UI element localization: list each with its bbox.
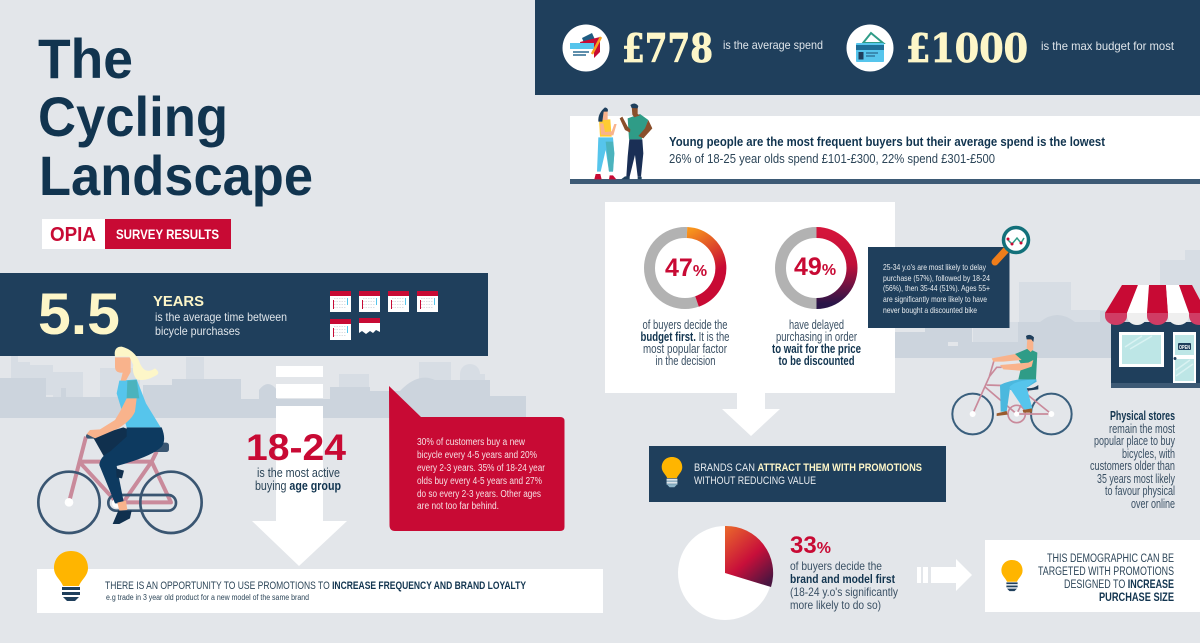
stat: 18-24: buying age group	[255, 478, 341, 493]
skyline right	[895, 250, 1200, 358]
years caption: YEARS	[153, 293, 204, 310]
callout: delay by age: purchase (57%), followed by 18-24	[883, 273, 990, 283]
banner: attract with promotions	[649, 446, 946, 502]
illustration: shop	[1105, 285, 1200, 388]
banner: young people: Young people are the most frequent buyers but their average spend is the lowest	[669, 134, 1106, 149]
text: physical stores: remain the most	[1109, 422, 1175, 436]
banner: opportunity: THERE IS AN OPPORTUNITY TO USE PROMOTIONS TO INCREASE FREQUENCY AND BRAND LOYALTY	[105, 580, 527, 592]
banner: attract with promotions: WITHOUT REDUCING VALUE	[694, 475, 816, 487]
donut caption: 47 percent: of buyers decide the	[642, 318, 728, 332]
callout: delay by age: never bought a discounted bike	[883, 305, 977, 315]
banner: opportunity: e.g trade in 3 year old product for a new model of the same brand	[106, 593, 309, 602]
donut: 47 percent	[650, 232, 721, 304]
stat: 18-24	[246, 427, 346, 493]
stat: 33 percent: 33%	[790, 532, 831, 559]
stat: 778: £778	[622, 26, 713, 72]
donut caption: 49 percent: to be discounted	[778, 354, 854, 368]
text: physical stores	[1090, 409, 1176, 511]
icon: bulb	[662, 457, 682, 487]
callout: purchase frequency: bicycle every 4-5 years and 20%	[417, 450, 537, 461]
callout: delay by age	[868, 228, 1028, 328]
callout: delay by age: (56%), then 35-44 (51%). Ages 55+	[883, 283, 990, 293]
callout: purchase frequency: every 2-3 years. 35% of 18-24 year	[417, 463, 546, 474]
stat: 5.5: 5.5	[38, 282, 120, 347]
illustration: man on bicycle	[952, 335, 1072, 434]
donut caption: 47 percent	[640, 318, 730, 368]
title: Cycling	[38, 85, 228, 148]
callout: purchase frequency: are not too far behind.	[417, 501, 499, 512]
pie chart: 33 percent	[678, 526, 773, 620]
text: physical stores: bicycles, with	[1122, 447, 1175, 461]
stat: 18-24: is the most active	[257, 465, 340, 480]
banner: young people	[570, 104, 1200, 184]
icon: card	[846, 24, 894, 72]
stat: 33 percent: more likely to do so)	[790, 598, 881, 612]
caption: max budget: is the max budget for most	[1041, 39, 1175, 53]
illustration: woman on bicycle	[38, 347, 202, 533]
text: physical stores: Physical stores	[1110, 409, 1175, 423]
donut caption: 49 percent: have delayed	[789, 318, 844, 332]
banner: increase purchase size: DESIGNED TO INCREASE	[1064, 579, 1174, 591]
callout: delay by age: are significantly more likely to have	[883, 294, 987, 304]
text: physical stores: to favour physical	[1105, 484, 1175, 498]
callout: purchase frequency: 30% of customers buy a new	[417, 437, 526, 448]
stat: 33 percent: of buyers decide the	[790, 559, 882, 573]
donut caption: 49 percent: to wait for the price	[772, 342, 861, 356]
panel: budget and discount donuts	[605, 202, 895, 393]
donut caption: 47 percent: in the decision	[656, 354, 716, 368]
arrow: right	[917, 559, 972, 591]
illustration: shop: OPEN	[1179, 345, 1190, 351]
icon: calendars	[330, 291, 438, 340]
skyline left	[0, 356, 526, 418]
arrow: large down	[252, 366, 347, 566]
callout: purchase frequency: do so every 2-3 years. Other ages	[417, 489, 541, 500]
logo badge: OPIA	[50, 224, 96, 246]
stat: 33 percent: (18-24 y.o's significantly	[790, 585, 898, 599]
donut caption: 47 percent: most popular factor	[643, 342, 727, 356]
years caption: bicycle purchases	[155, 324, 240, 338]
donut: 49 percent: 49%	[794, 253, 836, 281]
donut: 47 percent: 47%	[665, 254, 707, 282]
callout: purchase frequency: olds buy every 4-5 years and 27%	[417, 476, 542, 487]
title	[38, 27, 313, 207]
donut caption: 49 percent	[772, 318, 861, 368]
banner: young people: 26% of 18-25 year olds spend £101-£300, 22% spend £301-£500	[669, 151, 995, 166]
arrow: down to promotions	[722, 393, 780, 436]
donut: 49 percent	[780, 232, 852, 304]
banner: increase purchase size	[985, 540, 1200, 612]
icon: bulb	[54, 551, 88, 601]
donut caption: 47 percent: budget first. It is the	[640, 330, 730, 344]
illustration: two people	[594, 104, 652, 179]
text: physical stores: over online	[1131, 497, 1175, 511]
donut caption: 49 percent: purchasing in order	[776, 330, 857, 344]
icon: magnifier	[995, 228, 1028, 262]
stat: 18-24: 18-24	[246, 427, 346, 468]
icon: cheques	[562, 24, 610, 72]
stat: 33 percent	[790, 532, 898, 612]
years caption: is the average time between	[155, 310, 287, 324]
icon: bulb	[1001, 560, 1023, 591]
panel: spend header	[535, 0, 1200, 95]
stat: 1000: £1000	[906, 26, 1028, 72]
stat: 33 percent: brand and model first	[790, 572, 895, 586]
banner: increase purchase size: PURCHASE SIZE	[1099, 592, 1174, 604]
logo badge	[42, 219, 231, 249]
logo badge: SURVEY RESULTS	[116, 226, 219, 242]
caption: average spend: is the average spend	[723, 38, 823, 52]
title: The	[38, 27, 133, 90]
callout: purchase frequency	[389, 386, 564, 531]
title: Landscape	[39, 144, 313, 207]
callout: delay by age: 25-34 y.o's are most likely to delay	[883, 262, 987, 272]
banner: opportunity	[37, 551, 603, 613]
panel: 5.5 years	[0, 273, 488, 356]
banner: attract with promotions: BRANDS CAN ATTRACT THEM WITH PROMOTIONS	[694, 462, 922, 474]
years caption	[153, 293, 287, 338]
